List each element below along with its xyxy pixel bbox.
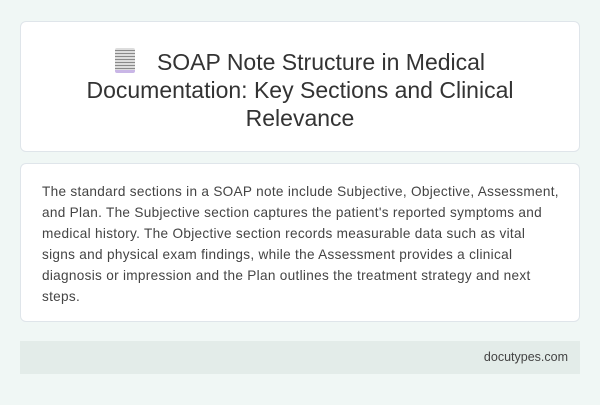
text block: steps. bbox=[42, 289, 80, 304]
text block: The standard sections in a SOAP note include Subjective, Objective, Assessment, bbox=[42, 184, 559, 199]
title: Relevance bbox=[246, 105, 354, 131]
panel: body text bbox=[20, 163, 580, 322]
title: SOAP Note Structure in Medical bbox=[157, 49, 485, 75]
text block: medical history. The Objective section records measurable data such as vital bbox=[42, 226, 525, 241]
panel: header bbox=[20, 21, 580, 152]
footer bbox=[20, 341, 580, 374]
text block: diagnosis or impression and the Plan outlines the treatment strategy and next bbox=[42, 268, 531, 283]
title bbox=[86, 48, 514, 131]
footer: docutypes.com bbox=[484, 350, 568, 364]
title: Documentation: Key Sections and Clinical bbox=[86, 77, 514, 103]
text block: and Plan. The Subjective section captures the patient's reported symptoms and bbox=[42, 205, 542, 220]
text block: signs and physical exam findings, while the Assessment provides a clinical bbox=[42, 247, 512, 262]
text block bbox=[42, 184, 559, 304]
